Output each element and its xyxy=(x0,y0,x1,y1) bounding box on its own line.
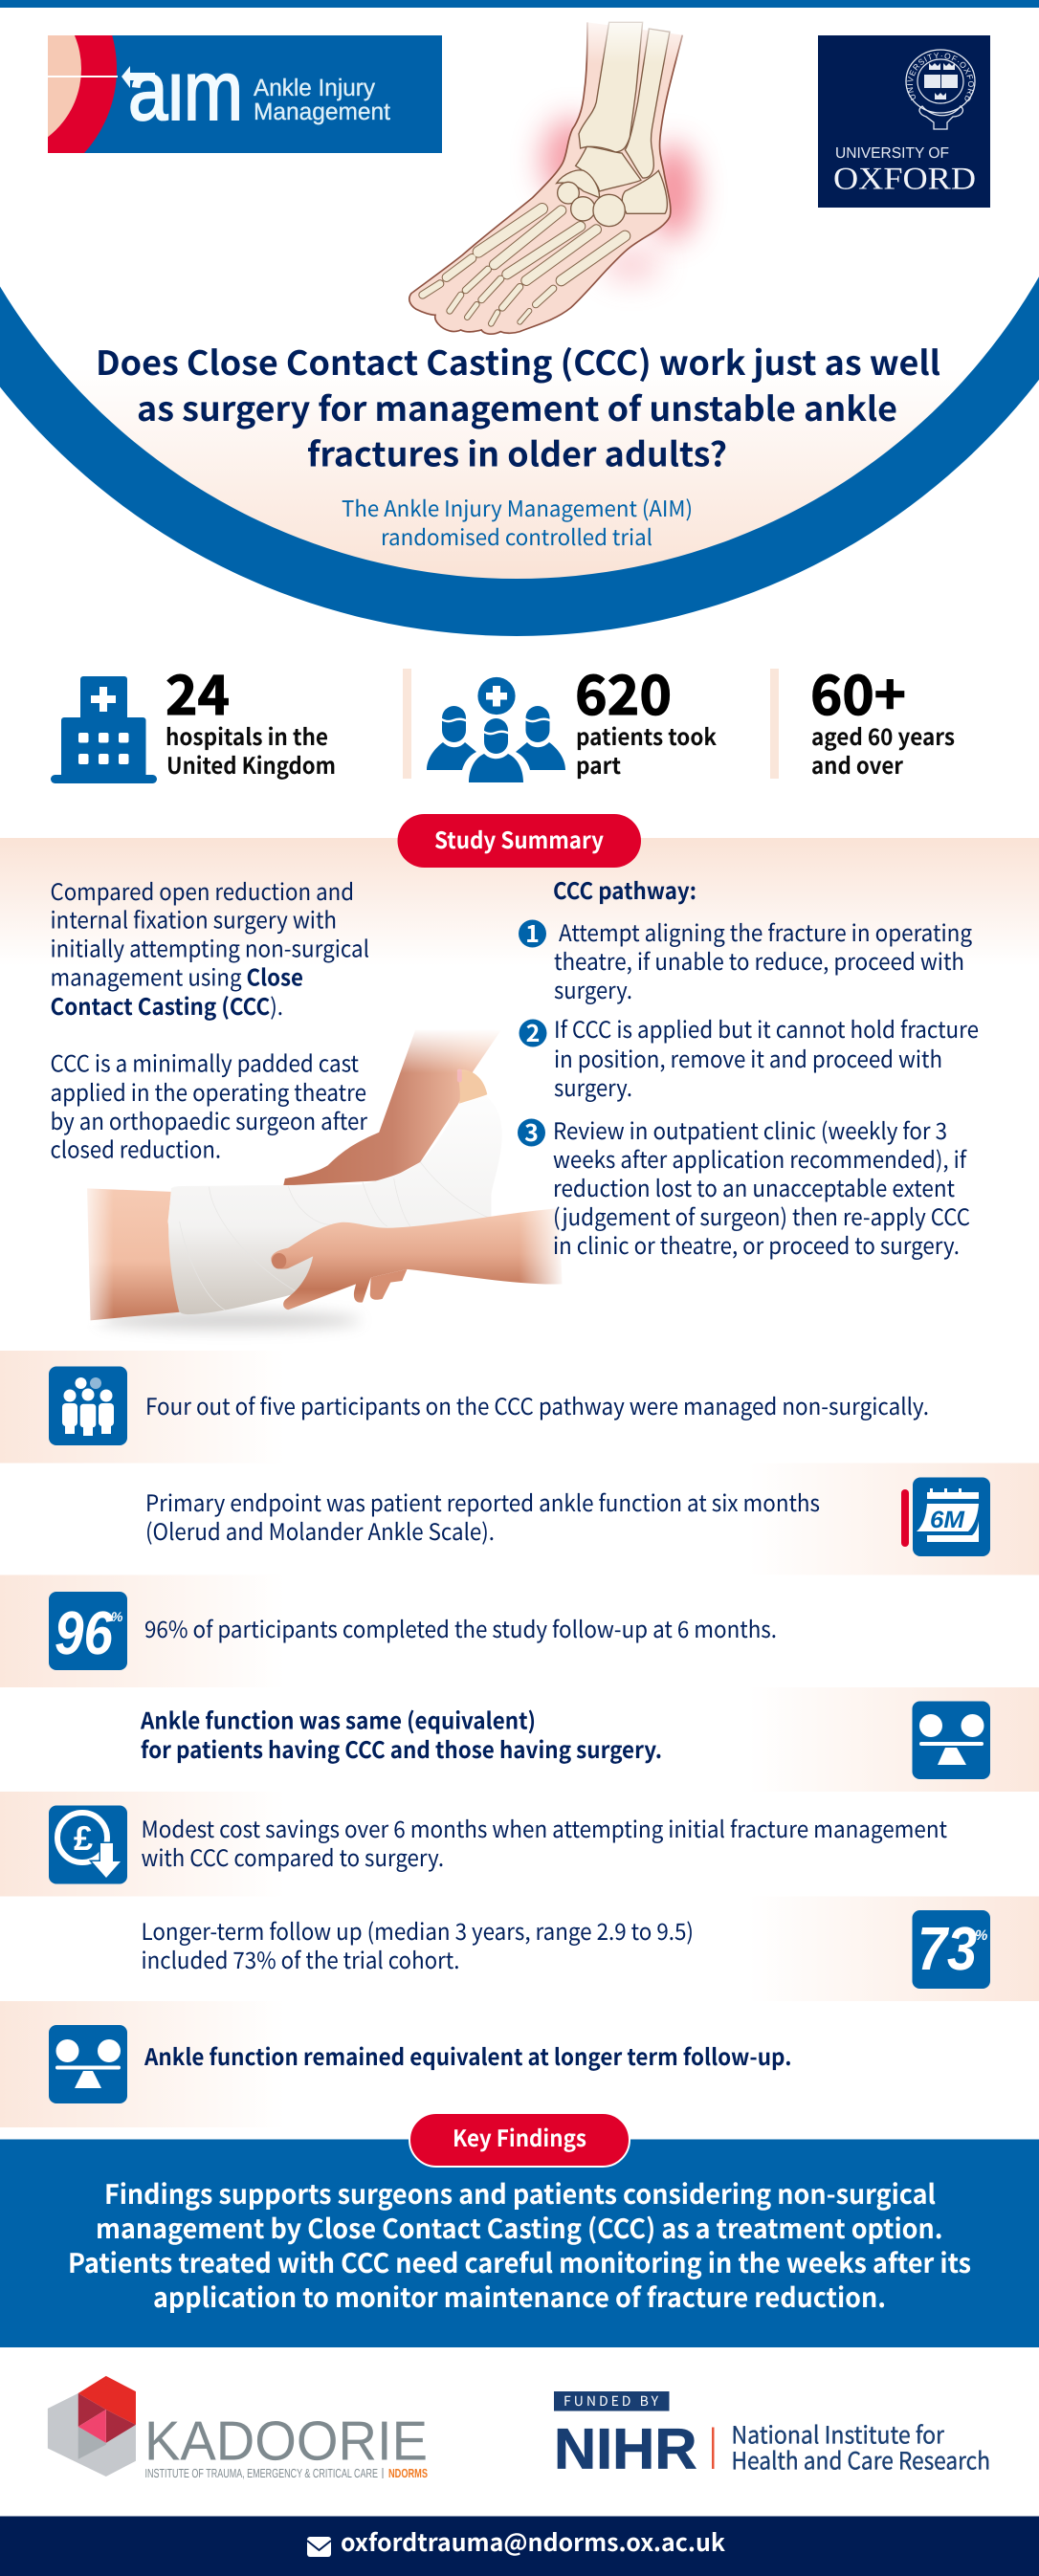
step 2: surgery. xyxy=(554,1069,632,1103)
row: modest cost savings xyxy=(0,1792,947,1896)
text: comparison description: closed reduction. xyxy=(50,1131,221,1165)
icon: balance xyxy=(913,1701,990,1779)
step 1: Attempt aligning the fracture in operating xyxy=(559,914,972,948)
stat: 60+ age: and over xyxy=(811,747,903,781)
icon: 96 percent: 96 xyxy=(55,1598,113,1667)
icon: envelope xyxy=(307,2537,331,2557)
stat: 24 hospitals xyxy=(51,652,336,783)
step 3 xyxy=(518,1112,970,1261)
icon: pound savings: £ xyxy=(74,1818,93,1858)
step 3: weeks after application recommended), if xyxy=(553,1141,967,1175)
stat: 60+ age: aged 60 years xyxy=(811,718,955,752)
logo: AIM Ankle Injury Management: Ankle Injury xyxy=(254,75,375,101)
logo: University of Oxford xyxy=(818,35,990,208)
step 3: (judgement of surgeon) then re-apply CCC xyxy=(553,1199,970,1232)
row: primary endpoint xyxy=(145,1464,1039,1574)
logo: AIM Ankle Injury Management: aim xyxy=(128,43,243,138)
logo: Kadoorie: INSTITUTE OF TRAUMA, EMERGENCY & CRITICAL CARE xyxy=(145,2466,378,2480)
row: ankle function equivalent xyxy=(140,1687,1039,1792)
row: equivalent at longer term: Ankle function remained equivalent at longer term follow-up. xyxy=(144,2038,792,2072)
step 1: theatre, if unable to reduce, proceed with xyxy=(554,943,964,977)
text: comparison description: Compared open reduction and xyxy=(50,873,354,907)
row: longer-term follow up xyxy=(142,1896,1039,2001)
logo: Kadoorie xyxy=(48,2376,428,2480)
header arc panel xyxy=(0,0,1039,636)
inner disc xyxy=(0,0,1039,579)
footer xyxy=(0,2516,1039,2576)
text: key findings statement: Patients treated with CCC need careful monitoring in the weeks after its xyxy=(68,2243,971,2281)
title: fractures in older adults? xyxy=(307,429,727,476)
panel: study summary xyxy=(0,814,1039,1329)
row: longer-term follow up: included 73% of the trial cohort. xyxy=(142,1942,459,1975)
step 1 xyxy=(519,914,972,1005)
icon: patients group xyxy=(427,677,565,782)
row: ankle function equivalent: Ankle function was same (equivalent) xyxy=(140,1703,536,1735)
logo: NIHR funded by: FUNDED BY xyxy=(564,2391,659,2411)
text: comparison description xyxy=(50,873,369,1165)
icon: Kadoorie hexagon xyxy=(48,2376,136,2477)
icon: calendar six months: 6M xyxy=(930,1507,965,1533)
pill: key findings xyxy=(409,2113,630,2167)
icon: 96 percent: % xyxy=(111,1609,123,1624)
title xyxy=(96,337,940,476)
heading: CCC pathway: CCC pathway: xyxy=(553,872,696,906)
subtitle: randomised controlled trial xyxy=(381,519,652,552)
row: modest cost savings: with CCC compared to surgery. xyxy=(142,1839,444,1873)
text: comparison description: Contact Casting (CCC). xyxy=(50,988,283,1022)
panel: key findings xyxy=(0,2113,1039,2347)
step 3: reduction lost to an unacceptable extent xyxy=(553,1170,955,1203)
logo: NIHR funded by: National Institute for xyxy=(731,2416,944,2451)
text: comparison description: management using Close xyxy=(50,958,303,993)
row: equivalent at longer term xyxy=(0,2001,792,2127)
stat: 24 hospitals: United Kingdom xyxy=(166,747,336,781)
text: comparison description: internal fixation surgery with xyxy=(50,901,337,936)
stat: 620 patients: part xyxy=(576,747,621,781)
pill: key findings: Key Findings xyxy=(453,2120,586,2153)
text: key findings statement: Findings supports surgeons and patients considering non-surgical xyxy=(104,2174,936,2213)
step 2: 2 xyxy=(526,1015,540,1049)
divider xyxy=(403,669,411,779)
icon: hospital xyxy=(51,676,157,783)
step 2: If CCC is applied but it cannot hold fracture xyxy=(554,1011,979,1045)
illustration: foot skeleton xyxy=(409,10,698,334)
subtitle: The Ankle Injury Management (AIM) xyxy=(342,491,693,523)
section background xyxy=(0,838,1039,966)
icon: calendar six months xyxy=(901,1477,990,1556)
pill: study summary xyxy=(398,814,641,868)
text: key findings statement: management by Close Contact Casting (CCC) as a treatment option. xyxy=(96,2209,943,2247)
step 3: in clinic or theatre, or proceed to surgery. xyxy=(553,1227,960,1261)
text: comparison description: by an orthopaedic surgeon after xyxy=(50,1103,368,1136)
logo: University of Oxford: OXFORD xyxy=(833,163,976,197)
row: 96 percent follow-up xyxy=(0,1574,777,1687)
row: primary endpoint: Primary endpoint was patient reported ankle function at six months xyxy=(145,1485,820,1518)
blue arc xyxy=(0,0,1039,636)
row: four out of five managed non-surgically xyxy=(0,1351,929,1464)
illustration: casted leg held by hands xyxy=(77,1028,565,1329)
footer: oxfordtrauma@ndorms.ox.ac.uk xyxy=(341,2524,725,2559)
row: modest cost savings: Modest cost savings over 6 months when attempting initial fracture management xyxy=(142,1811,947,1844)
row: four out of five managed non-surgically: Four out of five participants on the CCC pathway were managed non-surgically. xyxy=(145,1388,929,1421)
logo: NIHR funded by: Health and Care Research xyxy=(731,2443,990,2477)
stat: 620 patients: 620 xyxy=(575,652,672,731)
icon: balance xyxy=(49,2025,127,2103)
logo: AIM Ankle Injury Management: Management xyxy=(254,99,390,125)
icon: pound savings xyxy=(49,1806,127,1884)
logo: University of Oxford: UNIVERSITY OF xyxy=(835,145,949,162)
logo: Kadoorie: KADOORIE xyxy=(144,2411,428,2472)
step 3: Review in outpatient clinic (weekly for 3 xyxy=(553,1112,947,1146)
stat: 60+ age xyxy=(810,652,955,781)
pill: study summary: Study Summary xyxy=(434,822,604,855)
title: Does Close Contact Casting (CCC) work just as well xyxy=(96,337,940,385)
logo: NIHR funded by: NIHR xyxy=(554,2416,696,2481)
stat: 24 hospitals: 24 xyxy=(166,652,230,731)
row: ankle function equivalent: for patients having CCC and those having surgery. xyxy=(141,1731,662,1765)
row: longer-term follow up: Longer-term follow up (median 3 years, range 2.9 to 9.5) xyxy=(142,1913,694,1947)
crest xyxy=(906,50,975,129)
step 2: in position, remove it and proceed with xyxy=(554,1041,942,1074)
step 2 xyxy=(519,1011,979,1103)
logo: NIHR funded by xyxy=(554,2391,990,2481)
icon: 73 percent: % xyxy=(975,1927,987,1944)
logo: University of Oxford: UNIVERSITY·OF·OXFORD xyxy=(907,52,974,101)
row: 96 percent follow-up: 96% of participants completed the study follow-up at 6 months. xyxy=(144,1611,777,1644)
subtitle xyxy=(342,491,693,552)
icon: 73 percent: 73 xyxy=(917,1914,977,1983)
step 1: surgery. xyxy=(554,972,632,1005)
stat: 620 patients xyxy=(427,652,717,782)
text: key findings statement xyxy=(68,2174,971,2316)
step 1: 1 xyxy=(525,915,540,950)
text: comparison description: applied in the operating theatre xyxy=(50,1074,366,1108)
text: comparison description: CCC is a minimally padded cast xyxy=(50,1045,359,1079)
text: comparison description: initially attempting non-surgical xyxy=(50,930,369,964)
step 3: 3 xyxy=(524,1114,539,1149)
logo: AIM Ankle Injury Management xyxy=(48,35,442,153)
logo: Kadoorie: NDORMS xyxy=(388,2466,428,2480)
stat: 24 hospitals: hospitals in the xyxy=(166,718,328,752)
text: key findings statement: application to monitor maintenance of fracture reduction. xyxy=(153,2278,886,2316)
divider xyxy=(770,669,779,779)
title: as surgery for management of unstable ankle xyxy=(137,383,897,431)
row: primary endpoint: (Olerud and Molander Ankle Scale). xyxy=(145,1513,495,1547)
stat: 60+ age: 60+ xyxy=(810,652,906,731)
icon: group of people xyxy=(49,1366,127,1445)
stat: 620 patients: patients took xyxy=(576,718,717,752)
top bar xyxy=(0,0,1039,8)
